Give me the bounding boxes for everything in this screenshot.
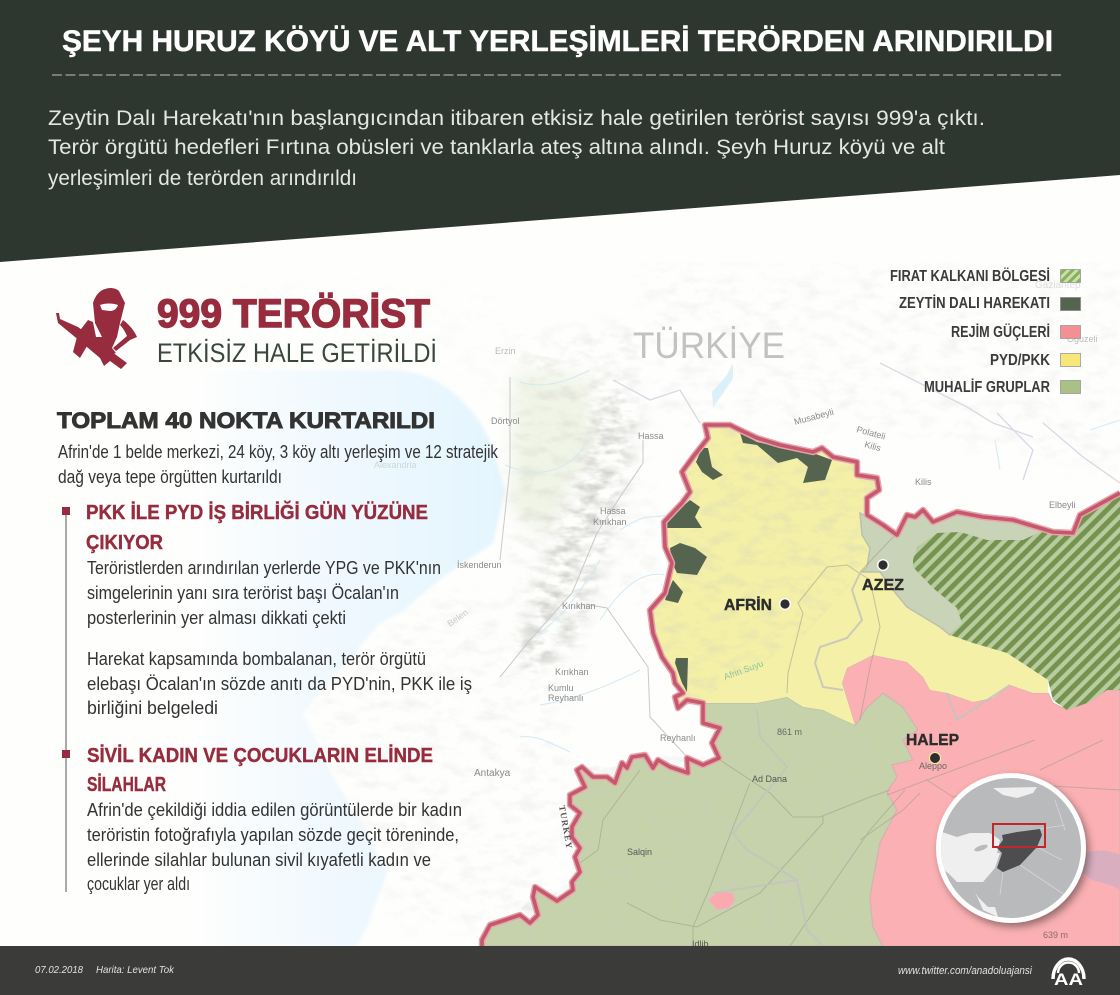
map place labels: Ad Dana	[752, 774, 787, 784]
map place labels: Reyhanlı	[548, 693, 584, 703]
map place labels: Musabeyli	[793, 407, 835, 427]
section heading: toplam 40 nokta: dağ veya tepe örgütten kurtarıldı	[58, 467, 282, 487]
mountain tint	[510, 370, 595, 540]
thin roads over regions	[580, 533, 1120, 946]
roads	[500, 377, 687, 757]
text block: PKK PYD: simgelerinin yanı sıra terörist başı Öcalan'ın	[87, 583, 399, 603]
timeline rule with markers	[62, 507, 70, 892]
terrain on coloured regions	[522, 428, 874, 912]
intro paragraph	[48, 107, 985, 190]
text block: PKK PYD: Harekat kapsamında bombalanan, terör örgütü	[87, 649, 426, 669]
text block: sivil kadın: ellerinde silahlar bulunan sivil kıyafetli kadın ve	[87, 850, 431, 870]
map place labels: Antakya	[474, 768, 511, 779]
city: Azez	[862, 559, 904, 594]
text block: sivil kadın	[87, 744, 462, 894]
icon: AA logo	[1053, 959, 1084, 989]
text block: sivil kadın: Afrin'de çekildiği iddia edilen görüntülerde bir kadın	[87, 800, 462, 820]
map place labels: Kilis	[863, 439, 882, 453]
map place labels: TURKEY	[557, 805, 575, 850]
intro paragraph: Zeytin Dalı Harekatı'nın başlangıcından itibaren etkisiz hale getirilen terörist sayısı 999'a çıktı.	[48, 107, 985, 130]
inset locator map	[930, 773, 1086, 923]
footer band	[0, 946, 1120, 995]
text block: PKK PYD: Teröristlerden arındırılan yerlerde YPG ve PKK'nın	[87, 558, 441, 578]
section heading: toplam 40 nokta	[57, 408, 499, 487]
map place labels: Aleppo	[919, 761, 947, 771]
intro paragraph: yerleşimleri de terörden arındırıldı	[48, 167, 357, 190]
text block: sivil kadın: SİLAHLAR	[87, 773, 166, 796]
map place labels: 639 m	[1043, 930, 1068, 940]
intro paragraph: Terör örgütü hedefleri Fırtına obüsleri ve tanklarla ateş altına alındı. Şeyh Huruz köyü ve alt	[48, 136, 945, 159]
city: Azez: AZEZ	[862, 577, 904, 594]
map place labels: Idlib	[692, 939, 709, 949]
region: PYD/PKK Afrin	[650, 425, 1048, 725]
map place labels: Salqin	[627, 847, 652, 857]
legend: MUHALİF GRUPLAR	[924, 378, 1050, 396]
map place labels: Hassa	[638, 431, 664, 441]
region: regime forces	[842, 655, 1120, 946]
map place labels: Oğuzeli	[1067, 334, 1098, 344]
legend: PYD/PKK	[990, 352, 1050, 369]
map place labels: Kilis	[915, 477, 932, 487]
footer credits	[35, 964, 1032, 977]
icon: AA logo: AA	[1054, 970, 1083, 989]
map place labels: Hassa	[600, 506, 626, 516]
footer credits: Harita: Levent Tok	[96, 964, 175, 976]
legend: ZEYTİN DALI HAREKATI	[899, 294, 1050, 312]
province border lines	[613, 363, 1120, 483]
map place labels: Kırıkhan	[562, 601, 596, 611]
admin boundary lines over regions	[713, 573, 1010, 946]
icon: masked terrorist with rifle	[56, 288, 137, 369]
text block: PKK PYD: elebaşı Öcalan'ın sözde anıtı da PYD'nin, PKK ile iş	[87, 674, 472, 694]
map background	[264, 268, 1120, 946]
map place labels: Reyhanlı	[660, 733, 696, 743]
map place labels	[374, 280, 1117, 949]
map place labels: Safrah	[1090, 858, 1117, 868]
Turkey-Syria border	[482, 425, 1120, 946]
sea: gulf of Iskenderun	[150, 370, 505, 946]
text block: PKK PYD: ÇIKIYOR	[86, 532, 164, 554]
text block: PKK PYD	[86, 500, 472, 718]
headline: 999 terörist: 999 TERÖRİST	[157, 291, 430, 336]
map place labels: Alexandria	[374, 460, 417, 470]
text block: sivil kadın: teröristin fotoğrafıyla yapılan sözde geçit töreninde,	[87, 825, 459, 845]
section heading: toplam 40 nokta: TOPLAM 40 NOKTA KURTARILDI	[57, 408, 435, 433]
map place labels: Kumlu	[548, 683, 574, 693]
mountain ridge hillshade	[517, 375, 644, 672]
legend	[890, 266, 1080, 396]
legend: REJİM GÜÇLERİ	[951, 322, 1050, 341]
text block: sivil kadın: SİVİL KADIN VE ÇOCUKLARIN ELİNDE	[87, 744, 433, 767]
text block: PKK PYD: birliğini belgeledi	[87, 698, 218, 718]
map place labels: Dörtyol	[491, 416, 520, 426]
map place labels: Gaziantep	[1035, 280, 1081, 291]
legend: FIRAT KALKANI BÖLGESİ	[890, 266, 1050, 285]
map place labels: Afrin Suyu	[722, 658, 765, 682]
section heading: toplam 40 nokta: Afrin'de 1 belde merkezi, 24 köy, 3 köy altı yerleşim ve 12 stratejik	[58, 442, 499, 462]
region: Azez rebels	[860, 510, 1053, 635]
rivers	[505, 370, 1120, 752]
footer credits: 07.02.2018	[35, 964, 83, 976]
map place labels: 861 m	[777, 727, 802, 737]
city: Afrin	[724, 596, 791, 614]
footer credits: www.twitter.com/anadoluajansi	[898, 965, 1032, 977]
text block: sivil kadın: çocuklar yer aldı	[87, 874, 190, 894]
map place labels: Kırıkhan	[593, 517, 627, 527]
text block: PKK PYD: PKK İLE PYD İŞ BİRLİĞİ GÜN YÜZÜNE	[86, 500, 428, 524]
map title: Türkiye: TÜRKİYE	[633, 325, 785, 366]
region: rebel groups south	[482, 693, 918, 946]
city: Halep	[906, 732, 959, 764]
map place labels: Elbeyli	[1049, 500, 1076, 510]
map place labels: İskenderun	[457, 560, 502, 570]
headline: 999 terörist	[157, 291, 437, 368]
text block: PKK PYD: posterlerinin yer alması dikkati çekti	[87, 608, 346, 628]
map place labels: Polateli	[855, 424, 887, 442]
hillshade terrain	[337, 280, 1109, 918]
title: ŞEYH HURUZ KÖYÜ VE ALT YERLEŞİMLERİ TERÖRDEN ARINDIRILDI	[62, 25, 1053, 58]
city: Afrin: AFRİN	[724, 596, 772, 614]
lake	[712, 363, 733, 407]
city: Halep: HALEP	[906, 732, 959, 749]
region: Euphrates Shield hatch	[913, 493, 1120, 710]
small regime pocket	[708, 892, 735, 910]
map place labels: Belen	[445, 607, 470, 629]
dark green patches: Olive Branch operation	[665, 433, 832, 692]
lake Safrah	[1082, 851, 1120, 890]
map place labels: Kırıkhan	[555, 667, 589, 677]
map place labels: Erzin	[495, 346, 516, 356]
headline: 999 terörist: ETKİSİZ HALE GETİRİLDİ	[157, 337, 437, 368]
header band	[0, 0, 1120, 262]
